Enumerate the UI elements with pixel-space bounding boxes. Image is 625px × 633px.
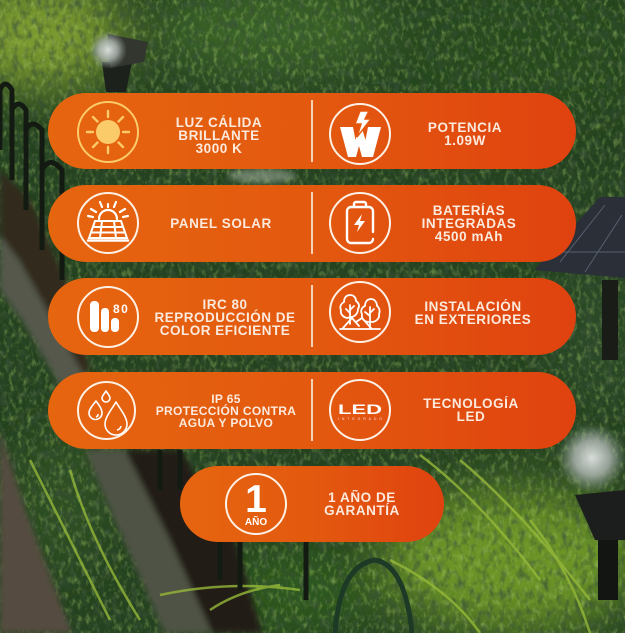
garden fence hoops xyxy=(0,84,412,633)
icon: colour index bars: 80 xyxy=(113,302,129,316)
text: IP rating xyxy=(156,392,296,430)
text: batteries: 4500 mAh xyxy=(435,229,503,244)
text: colour rendering: COLOR EFICIENTE xyxy=(160,322,290,338)
divider: row 1 xyxy=(311,100,313,162)
lamp: lower right xyxy=(557,423,625,600)
bright foliage foreground xyxy=(30,455,590,633)
panel: row 3 xyxy=(48,278,576,355)
icon: one year xyxy=(225,473,287,535)
icon: outdoor trees xyxy=(329,281,391,343)
text: outdoor installation: INSTALACIÓN xyxy=(424,299,522,314)
text: warranty: GARANTÍA xyxy=(324,503,400,518)
text: power xyxy=(428,120,502,148)
text: solar panel: PANEL SOLAR xyxy=(170,216,272,231)
panel: row 4 xyxy=(48,372,576,449)
lamp: top left xyxy=(89,31,148,92)
text: IP rating: PROTECCIÓN CONTRA xyxy=(156,404,296,418)
panel: warranty xyxy=(180,466,444,542)
text: batteries: INTEGRADAS xyxy=(422,216,516,231)
text: LED technology xyxy=(423,396,519,424)
stone path and kerb xyxy=(0,170,262,633)
divider: row 3 xyxy=(311,285,313,347)
text: colour rendering: IRC 80 xyxy=(202,296,248,312)
icon: LED xyxy=(329,379,391,441)
icon: warm sun xyxy=(77,101,139,163)
icon: battery xyxy=(329,192,391,254)
icon: one year: AÑO xyxy=(245,515,267,528)
icon: water drops xyxy=(77,381,136,440)
text: outdoor installation xyxy=(415,299,531,327)
text: IP rating: AGUA Y POLVO xyxy=(179,416,273,430)
text: LED technology: LED xyxy=(457,409,485,424)
icon: LED: INTEGRADO xyxy=(338,417,382,421)
icon: colour index bars xyxy=(77,286,139,348)
text: warm light: 3000 K xyxy=(196,141,242,156)
icon: solar panel xyxy=(77,192,139,254)
lamp: centre glow xyxy=(228,169,296,183)
text: warm light: BRILLANTE xyxy=(178,128,260,143)
text: IP rating: IP 65 xyxy=(211,392,241,406)
lamp: solar panel right xyxy=(534,197,625,360)
text: batteries: BATERÍAS xyxy=(433,203,505,218)
text: warm light: LUZ CÁLIDA xyxy=(176,115,262,130)
text: warm light xyxy=(176,115,262,156)
divider: row 2 xyxy=(311,192,313,254)
text: power: 1.09W xyxy=(444,133,486,148)
text: colour rendering: REPRODUCCIÓN DE xyxy=(154,310,296,324)
text: colour rendering xyxy=(154,296,296,338)
text: LED technology: TECNOLOGÍA xyxy=(423,396,519,411)
divider: row 4 xyxy=(311,379,313,441)
panel: row 2 xyxy=(48,185,576,262)
text: batteries xyxy=(422,203,516,244)
text: outdoor installation: EN EXTERIORES xyxy=(415,312,531,327)
icon: LED: LED xyxy=(338,401,382,417)
icon: one year: 1 xyxy=(245,478,267,521)
text: warranty: 1 AÑO DE xyxy=(328,490,396,505)
panel: row 1 xyxy=(48,93,576,169)
icon: power W xyxy=(329,103,391,165)
text: warranty xyxy=(324,490,400,518)
text: power: POTENCIA xyxy=(428,120,502,135)
